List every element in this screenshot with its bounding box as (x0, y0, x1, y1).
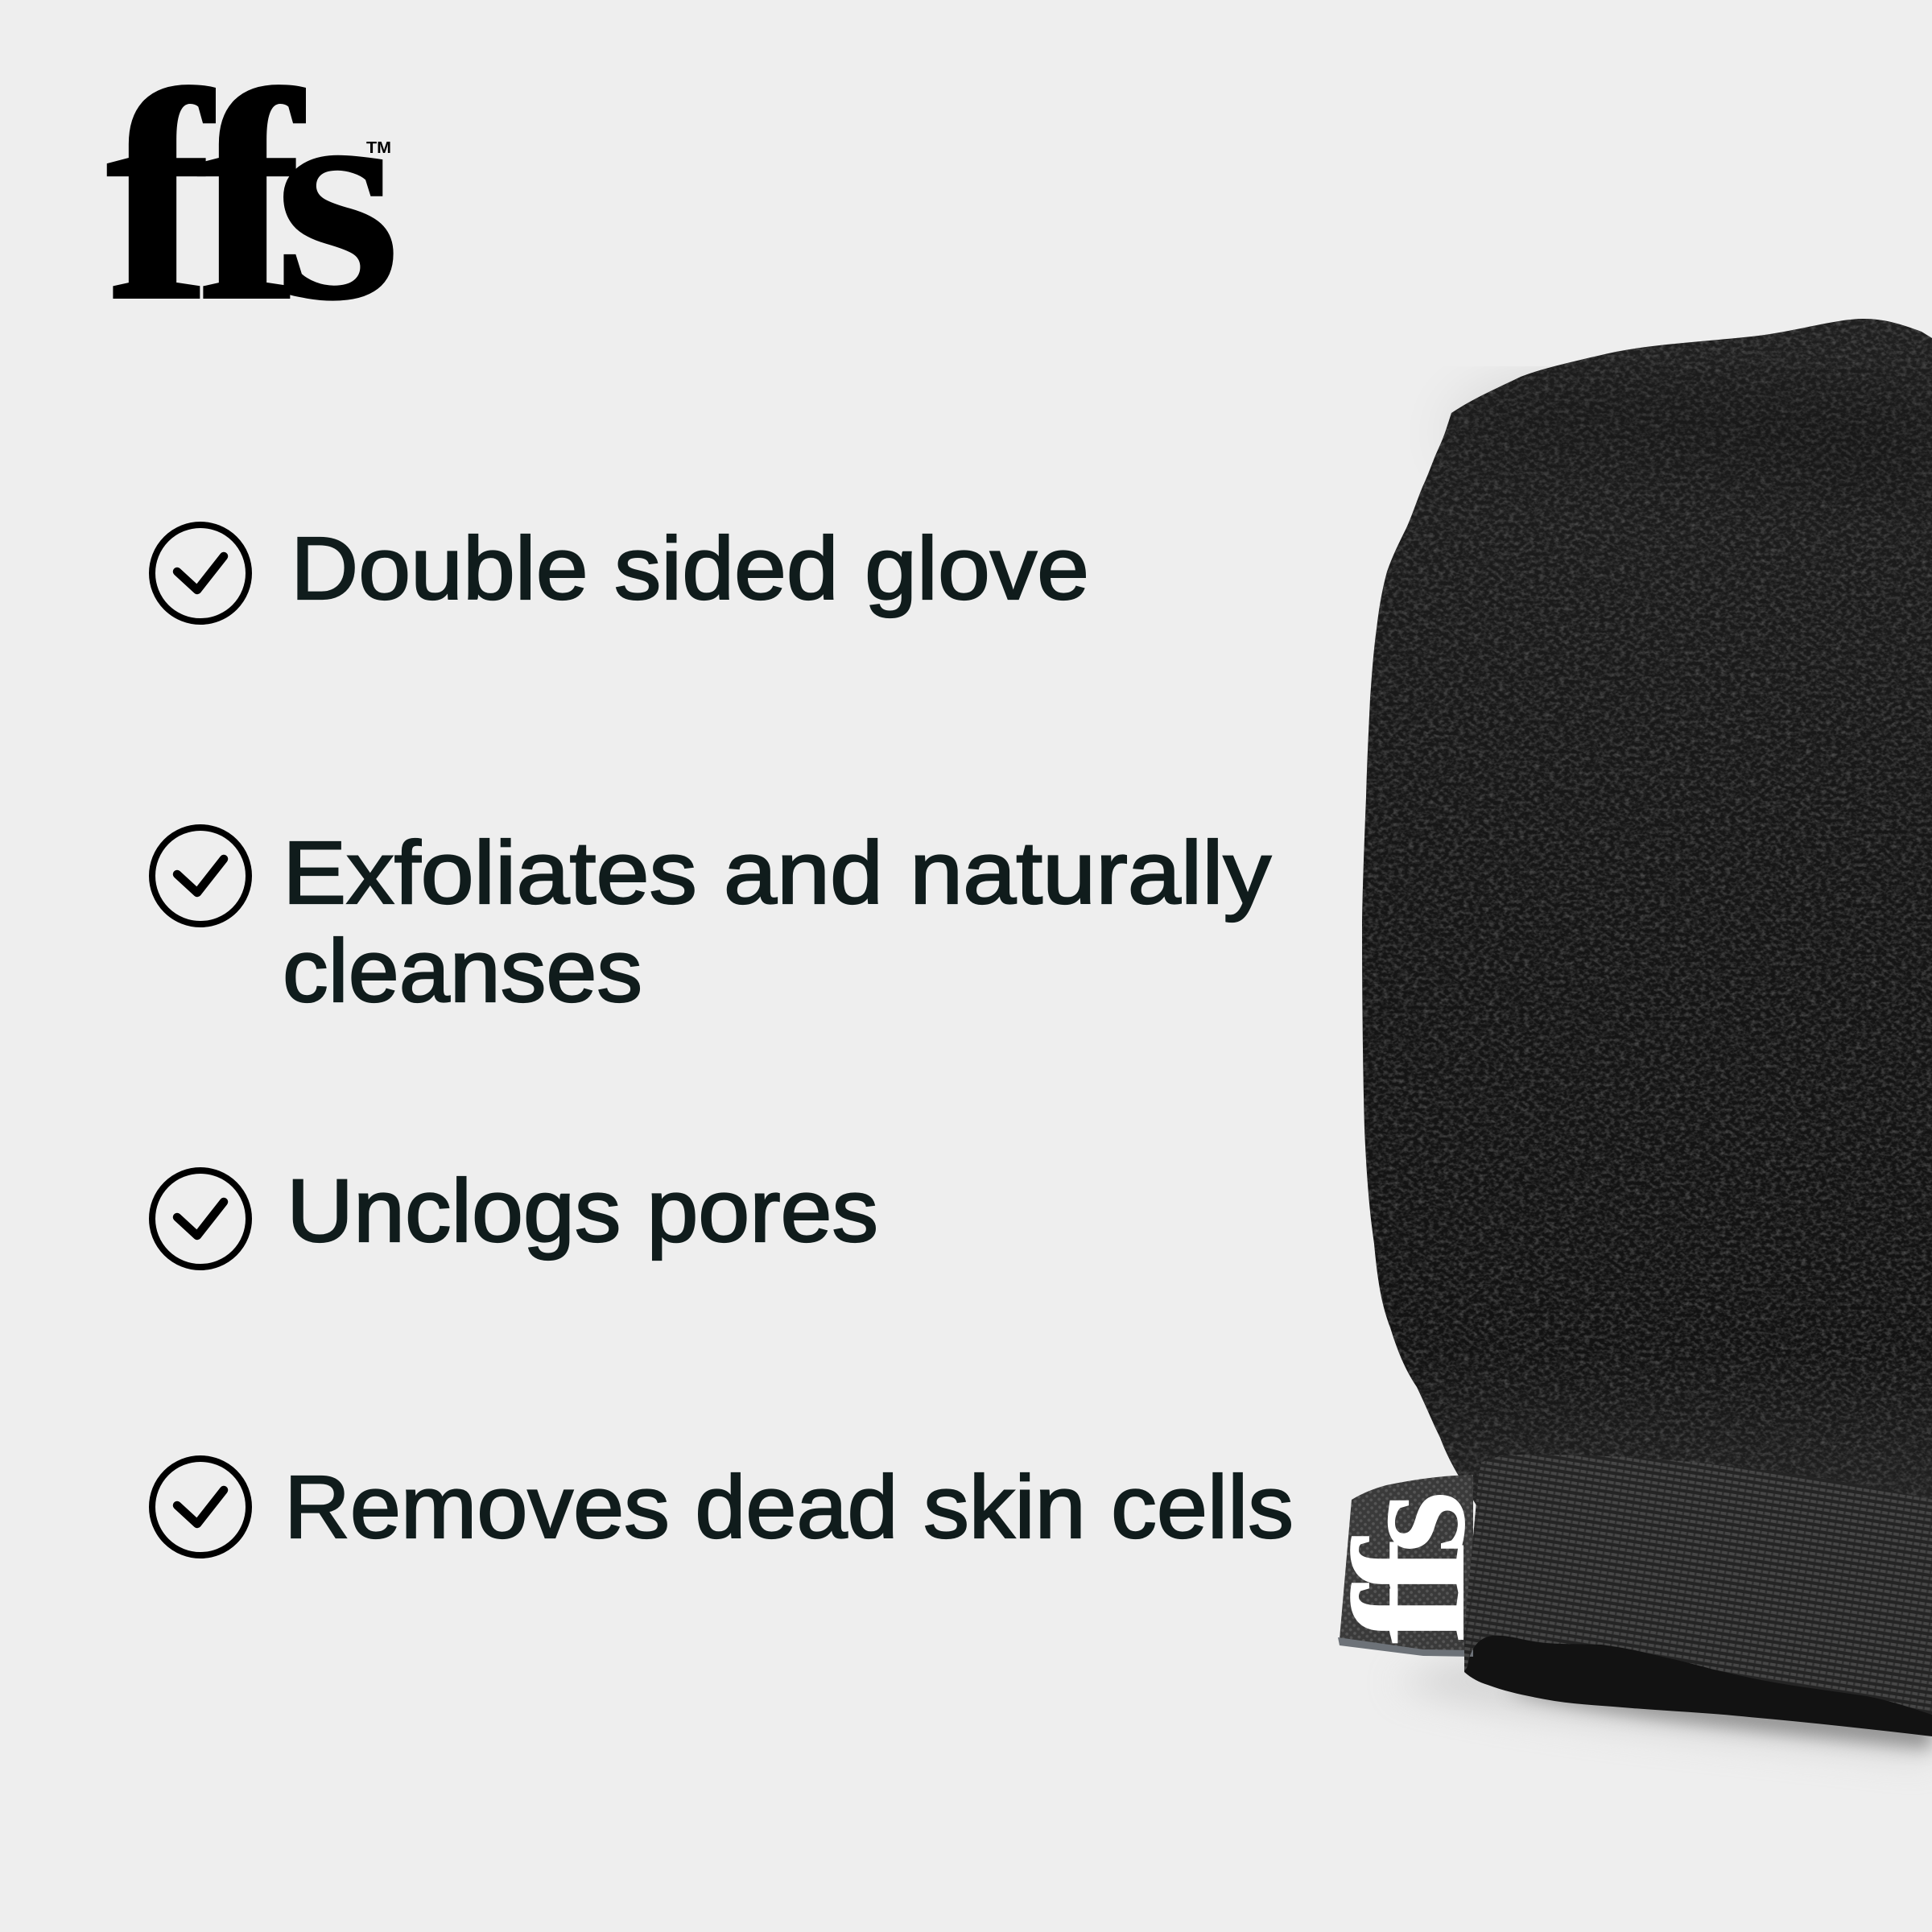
product photo: exfoliating glove (1320, 319, 1932, 1759)
logo: ffs (106, 30, 400, 362)
wide faint shadow (1393, 1658, 1932, 1759)
tag logo: f (1320, 1536, 1498, 1598)
logo: ffs: s (275, 31, 400, 362)
logo: ffs: f (106, 30, 214, 362)
tag logo: s (1321, 1491, 1499, 1554)
feature 2: exfoliates and naturally cleanses: cleanses (283, 922, 642, 1021)
contact shadow (1505, 1686, 1932, 1748)
tag logo: f (1320, 1583, 1498, 1645)
feature 2: exfoliates and naturally cleanses: Exfoliates and naturally (283, 824, 1271, 923)
feature 2: exfoliates and naturally cleanses (152, 824, 1271, 1021)
feature 4: removes dead skin cells: Removes dead skin cells (284, 1458, 1294, 1557)
hanging tag (1320, 1475, 1499, 1657)
trademark mark: TM (366, 139, 391, 157)
feature 1: double sided glove: Double sided glove (291, 519, 1089, 618)
glove shading (1449, 388, 1932, 499)
glove body (1362, 319, 1932, 1530)
feature 3: unclogs pores: Unclogs pores (287, 1162, 878, 1261)
elastic band (1464, 1455, 1932, 1715)
underside opening (1464, 1610, 1932, 1736)
logo: ffs: f (196, 30, 304, 362)
tag logo (1320, 1491, 1499, 1645)
